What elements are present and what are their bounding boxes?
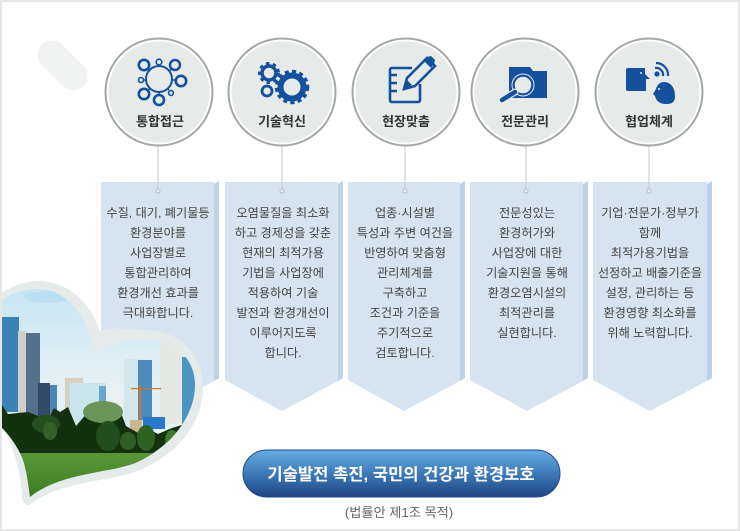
caption: (법률안 제1조 목적) <box>345 505 453 520</box>
panel text: 현장맞춤: 조건과 기준을 <box>370 306 440 320</box>
label: 통합접근: 통합접근 <box>136 114 184 129</box>
panel text: 협업체계: 설정, 관리하는 등 <box>606 286 694 300</box>
connector: 기술혁신 <box>280 146 284 193</box>
panel text: 기술혁신: 적용하여 기술 <box>248 286 318 300</box>
label: 기술혁신: 기술혁신 <box>258 114 306 129</box>
connector: 현장맞춤 <box>403 146 407 193</box>
panel text: 협업체계: 함께 <box>639 226 661 240</box>
panel text: 현장맞춤: 구축하고 <box>383 286 427 300</box>
panel: 통합접근 <box>101 181 219 411</box>
panel text: 현장맞춤: 반영하여 맞춤형 <box>364 246 446 260</box>
panel text: 통합접근: 수질, 대기, 폐기물등 <box>106 206 210 220</box>
photo: heart-shaped city and park <box>0 281 203 505</box>
banner: 기술발전 촉진, 국민의 건강과 환경보호 <box>243 450 560 497</box>
connector: 협업체계 <box>647 146 651 193</box>
badge: 협업체계 <box>596 38 702 146</box>
panel text: 협업체계: 기업·전문가·정부가 <box>601 206 699 220</box>
panel: 협업체계 <box>593 181 712 411</box>
panel text: 통합접근: 사업장별로 <box>130 246 186 260</box>
badge: 기술혁신 <box>228 38 336 146</box>
panel text: 통합접근: 환경분야를 <box>130 226 186 240</box>
panel text: 기술혁신: 발전과 환경개선이 <box>236 306 330 320</box>
panel: 전문관리 <box>470 181 588 411</box>
panel text: 전문관리: 환경오염시설의 <box>488 286 566 300</box>
connector: 통합접근 <box>156 146 160 193</box>
panel text: 협업체계 <box>598 206 702 340</box>
panel: 현장맞춤 <box>348 181 465 411</box>
panel text: 기술혁신: 기법을 사업장에 <box>242 266 324 280</box>
icon: network of circles <box>138 59 186 105</box>
panel text: 통합접근: 환경개선 효과를 <box>117 286 199 300</box>
label: 전문관리: 전문관리 <box>501 114 549 129</box>
panel text: 기술혁신: 오염물질을 최소화 <box>236 206 330 220</box>
panel text: 전문관리: 실현합니다. <box>497 326 557 340</box>
icon: notepad and pencil <box>390 56 435 102</box>
panel text: 기술혁신: 이루어지도록 <box>249 326 317 340</box>
badge: 전문관리 <box>472 38 578 146</box>
icon: folder and magnifier <box>502 67 547 100</box>
decorative pill <box>52 55 73 76</box>
icon: gears <box>260 64 308 102</box>
panel text: 현장맞춤: 관리체계를 <box>377 266 433 280</box>
panel text: 현장맞춤 <box>357 206 453 360</box>
panel text: 전문관리 <box>486 206 568 340</box>
panel text: 현장맞춤: 업종·시설별 <box>375 206 435 220</box>
panel text: 전문관리: 전문성있는 <box>499 206 555 220</box>
panel text: 기술혁신: 하고 경제성을 갖춘 <box>235 226 331 240</box>
panel text: 통합접근: 극대화합니다. <box>123 306 193 320</box>
panel text: 현장맞춤: 특성과 주변 여건을 <box>357 226 453 240</box>
panel text: 기술혁신 <box>235 206 331 360</box>
icon: talking heads <box>626 63 675 104</box>
panel text: 협업체계: 최적가용기법을 <box>611 246 689 260</box>
panel text: 전문관리: 기술지원을 통해 <box>486 266 568 280</box>
panel text: 통합접근 <box>106 206 210 320</box>
badge: 현장맞춤 <box>352 38 460 146</box>
panel text: 전문관리: 사업장에 대한 <box>492 246 562 260</box>
panel text: 전문관리: 최적관리를 <box>499 306 555 320</box>
panel text: 기술혁신: 현재의 최적가용 <box>242 246 324 260</box>
label: 현장맞춤: 현장맞춤 <box>382 114 430 129</box>
connector: 전문관리 <box>524 146 528 193</box>
panel text: 현장맞춤: 주기적으로 <box>377 326 433 340</box>
panel text: 기술혁신: 합니다. <box>264 346 302 360</box>
panel text: 현장맞춤: 검토합니다. <box>375 346 435 360</box>
badge: 통합접근 <box>106 38 212 146</box>
panel text: 협업체계: 위해 노력합니다. <box>607 326 693 340</box>
banner: 기술발전 촉진, 국민의 건강과 환경보호: 기술발전 촉진, 국민의 건강과 환경보호 <box>267 465 535 484</box>
panel text: 전문관리: 환경허가와 <box>499 226 555 240</box>
panel: 기술혁신 <box>225 181 343 411</box>
panel text: 협업체계: 선정하고 배출기준을 <box>598 266 702 280</box>
panel text: 통합접근: 통합관리하여 <box>124 266 192 280</box>
panel text: 협업체계: 환경영향 최소화를 <box>603 306 697 320</box>
label: 협업체계: 협업체계 <box>625 114 673 129</box>
